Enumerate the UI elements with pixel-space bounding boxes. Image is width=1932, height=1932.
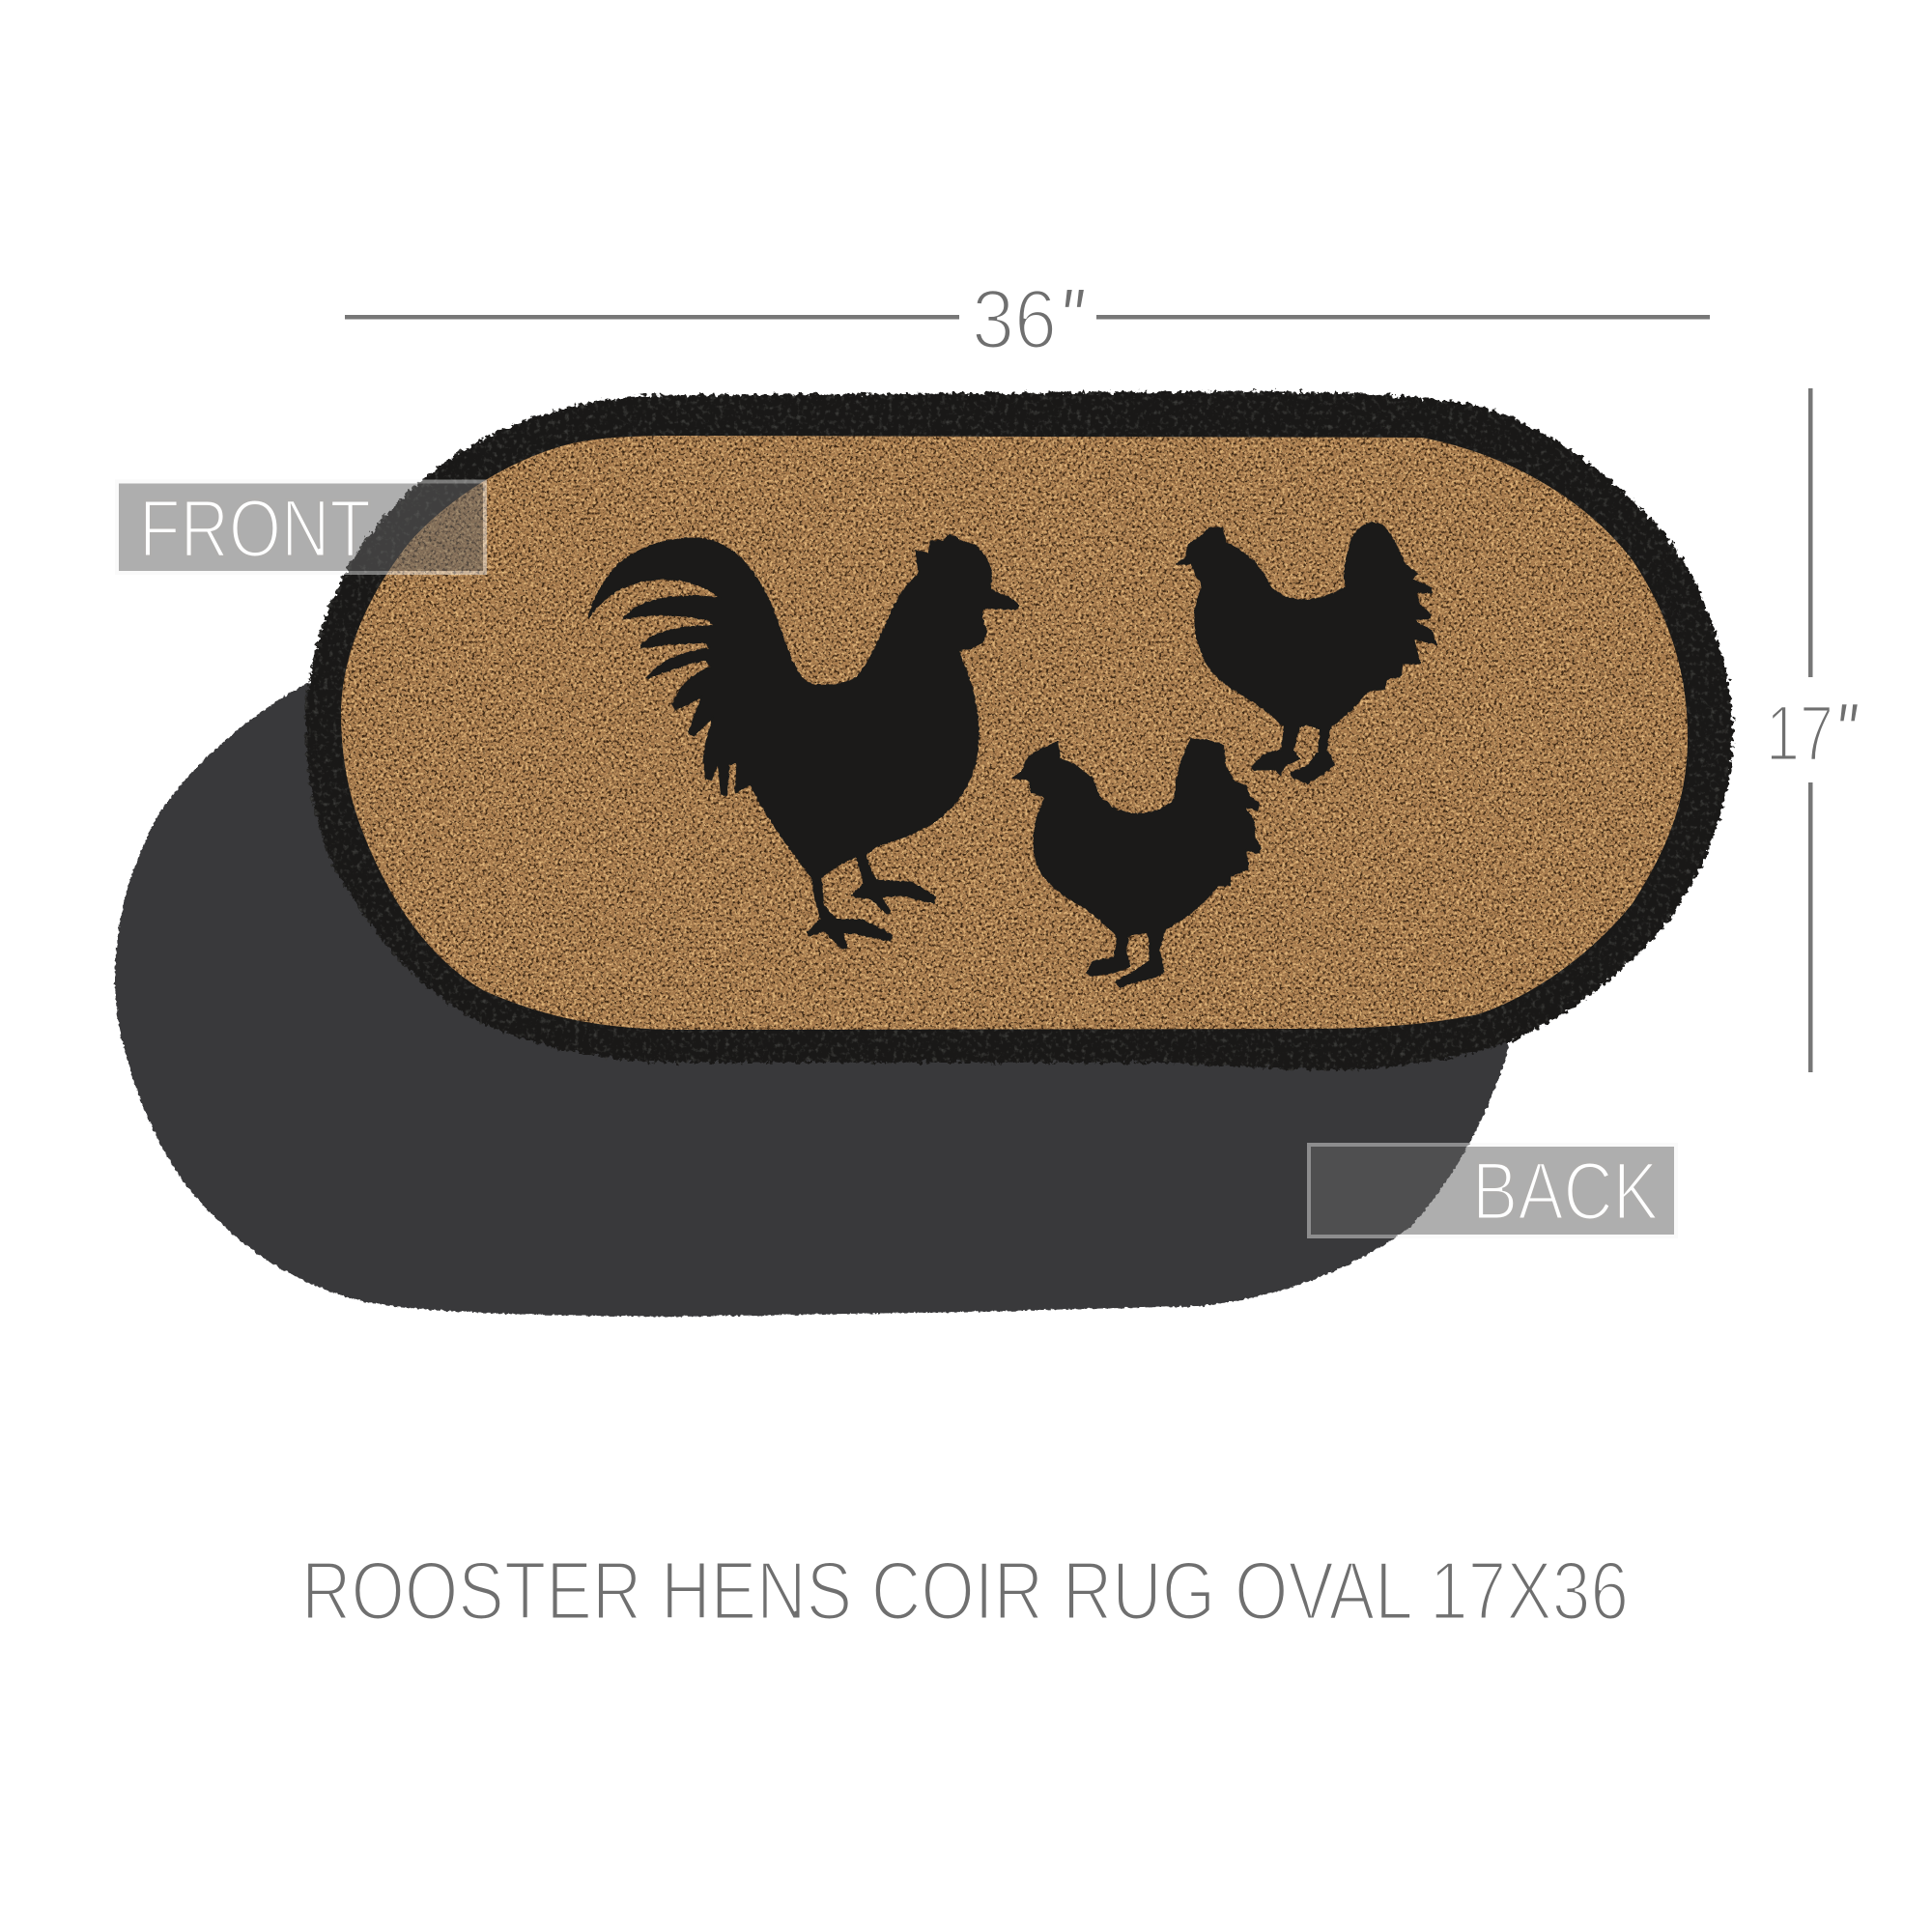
rug black border (305, 391, 1733, 1070)
icon: lower hen silhouette (1013, 739, 1261, 987)
dimension: width 36 inches: " (1059, 270, 1085, 366)
rug coir centre (341, 436, 1688, 1030)
dimension: width 36 inches (345, 270, 1710, 366)
icon: rooster silhouette (588, 534, 1018, 949)
dimension: height 17 inches (1766, 388, 1858, 1072)
rug front side (305, 391, 1733, 1070)
dimension: width 36 inches: 36 (972, 273, 1057, 366)
icon: upper hen silhouette (1176, 523, 1436, 783)
dimension: height 17 inches: " (1834, 687, 1858, 778)
label: BACK: BACK (1472, 1146, 1659, 1236)
dimension: height 17 inches: 17 (1766, 690, 1833, 778)
rug back side (115, 683, 1509, 1317)
title: ROOSTER HENS COIR RUG OVAL 17X36 (301, 1546, 1629, 1637)
label: BACK (1309, 1145, 1676, 1236)
label: FRONT: FRONT (139, 483, 371, 574)
